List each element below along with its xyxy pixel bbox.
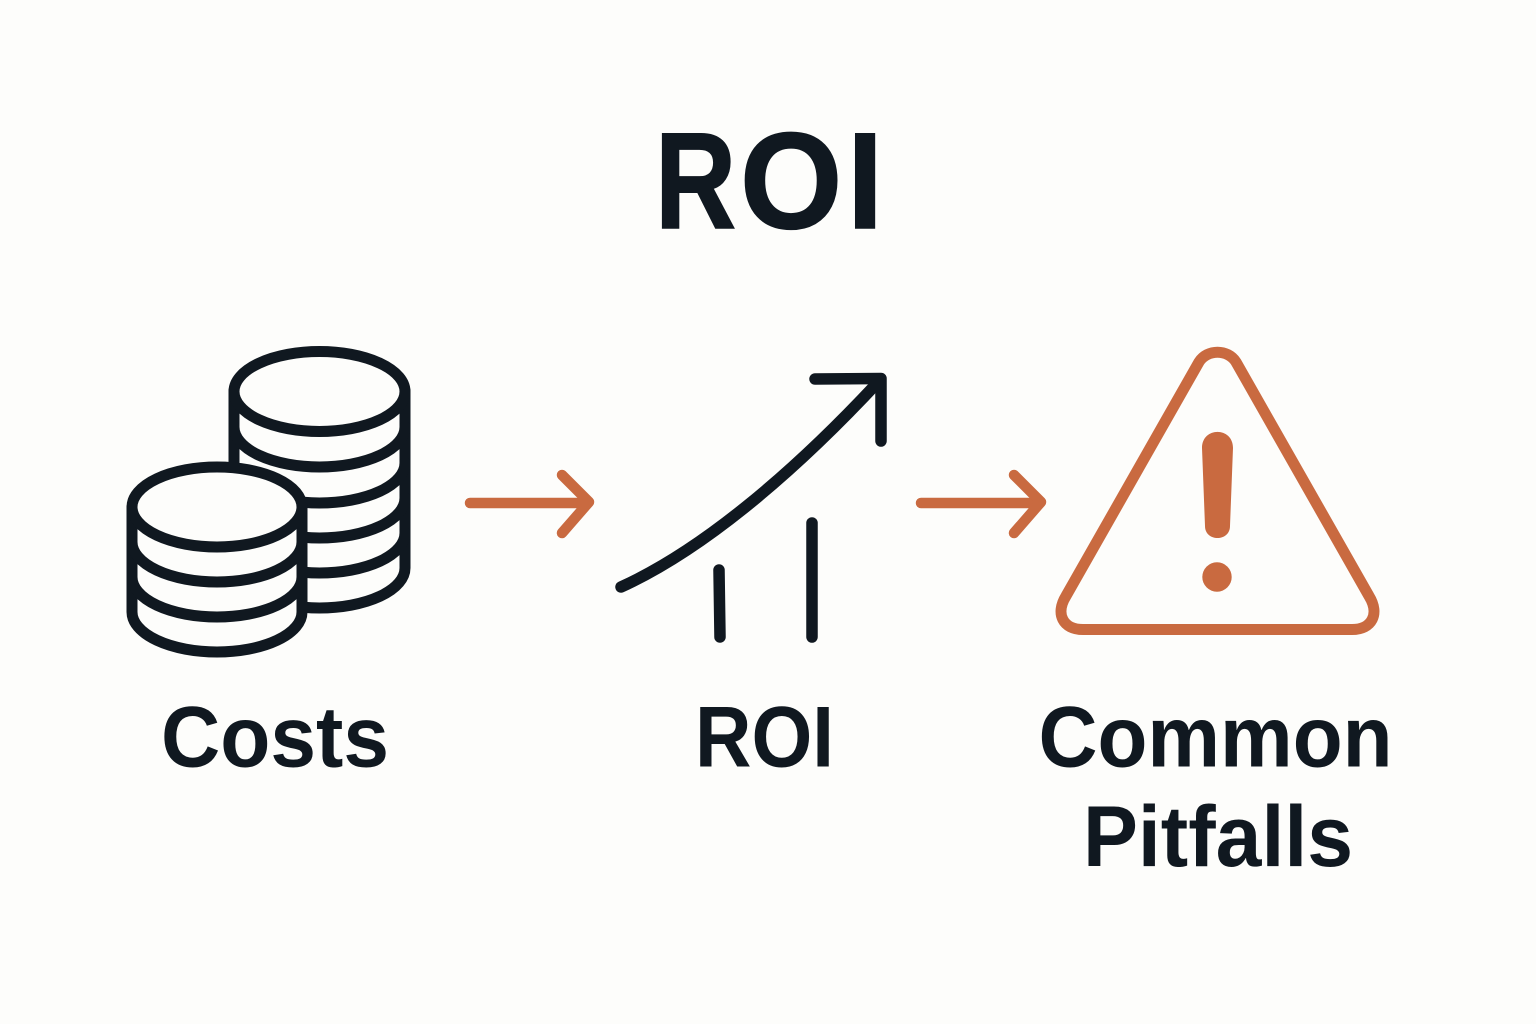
icon: coin stacks [132,352,405,652]
front coin stack [132,467,302,652]
label: Common Pitfalls: Pitfalls [1083,789,1353,885]
label: ROI: ROI [695,690,834,786]
title [655,105,883,258]
label: Common Pitfalls [1038,690,1392,885]
icon: rising growth arrow with bars [621,378,881,637]
label: Costs: Costs [161,690,389,786]
arrow: costs to ROI [470,475,589,533]
title: O [740,105,842,258]
arrow: ROI to pitfalls [921,475,1041,533]
title: I [847,105,883,258]
label: Common Pitfalls: Common [1038,690,1392,786]
icon: warning triangle [1061,352,1374,630]
title: R [655,105,736,258]
back coin stack [234,352,405,608]
